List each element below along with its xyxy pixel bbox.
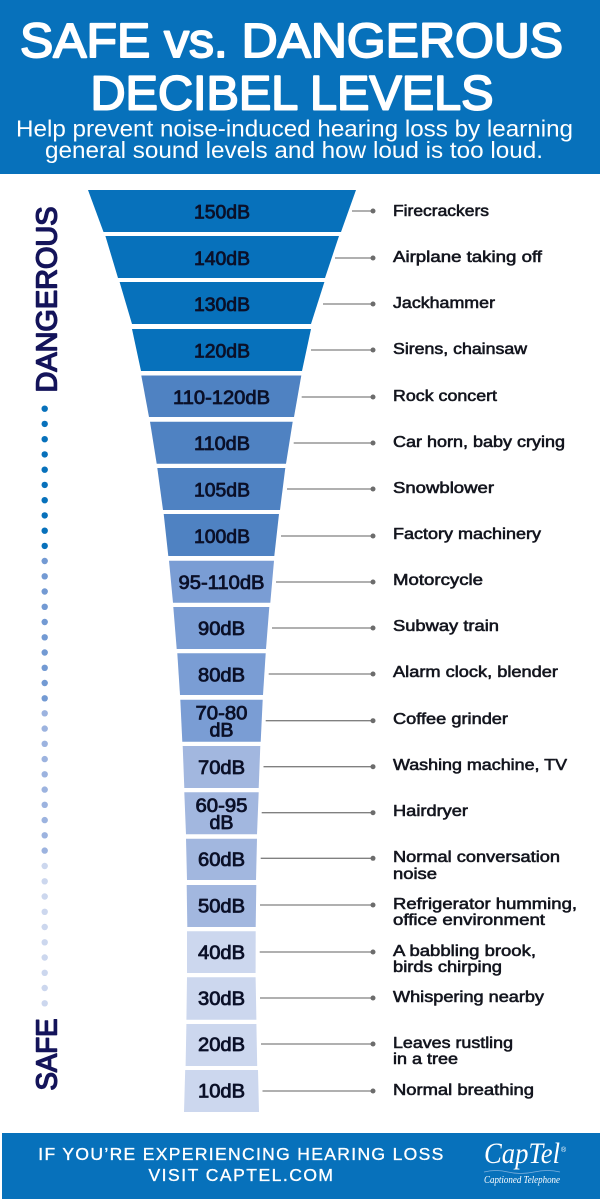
row: 100dB: 100dB xyxy=(194,527,250,548)
row: 150dB xyxy=(88,190,489,232)
row: 105dB: 105dB xyxy=(194,480,250,502)
row: 50dB: office environment xyxy=(393,912,546,929)
row: 40dB: A babbling brook, xyxy=(393,943,536,960)
funnel chart xyxy=(88,190,577,1112)
row: 60-95dB: dB xyxy=(210,813,234,834)
row: 110dB xyxy=(150,422,565,464)
row: 70-80dB xyxy=(180,700,509,742)
row: 120dB: Sirens, chainsaw xyxy=(393,341,527,358)
subtitle: Help prevent noise-induced hearing loss by learning xyxy=(16,116,573,142)
title: DECIBEL LEVELS xyxy=(90,66,494,120)
row: 150dB: 150dB xyxy=(194,203,250,224)
call to action: IF YOU’RE EXPERIENCING HEARING LOSS xyxy=(38,1144,443,1164)
row: 140dB: Airplane taking off xyxy=(393,249,543,266)
row: 110dB: Car horn, baby crying xyxy=(393,434,565,451)
row: 100dB: Factory machinery xyxy=(393,526,541,543)
subtitle xyxy=(16,116,573,163)
row: 50dB: 50dB xyxy=(198,896,245,918)
row: 90dB: 90dB xyxy=(198,619,245,640)
row: 40dB: birds chirping xyxy=(393,959,502,976)
logo: CapTel: ® xyxy=(561,1146,567,1154)
row: 30dB: Whispering nearby xyxy=(393,989,544,1006)
row: 120dB: 120dB xyxy=(194,342,250,362)
row: 60dB: noise xyxy=(393,866,437,883)
row: 60-95dB: 60-95 xyxy=(196,796,248,817)
row: 95-110dB: Motorcycle xyxy=(393,572,483,589)
row: 120dB xyxy=(132,329,527,371)
row: 70-80dB: 70-80 xyxy=(196,703,248,724)
row: 110-120dB: Rock concert xyxy=(393,388,498,405)
row: 60-95dB xyxy=(184,792,469,834)
scale label: safe: SAFE xyxy=(32,1018,64,1090)
subtitle: general sound levels and how loud is too loud. xyxy=(45,137,543,163)
row: 110dB: 110dB xyxy=(194,434,250,455)
row: 30dB: 30dB xyxy=(198,989,245,1010)
dotted scale xyxy=(42,406,48,1006)
row: 130dB: 130dB xyxy=(194,295,250,316)
row: 70dB: Washing machine, TV xyxy=(393,757,567,774)
row: 140dB xyxy=(105,236,543,278)
row: 130dB xyxy=(120,282,496,324)
row: 60dB: Normal conversation xyxy=(393,849,560,866)
row: 10dB: Normal breathing xyxy=(393,1082,534,1099)
row: 60dB: 60dB xyxy=(198,850,245,871)
row: 80dB: 80dB xyxy=(198,666,245,686)
footer panel xyxy=(2,1133,600,1199)
row: 20dB: in a tree xyxy=(393,1051,458,1068)
row: 70dB: 70dB xyxy=(198,758,245,779)
row: 90dB: Subway train xyxy=(393,618,499,635)
row: 70-80dB: Coffee grinder xyxy=(393,711,509,728)
title xyxy=(20,14,563,120)
row: 110-120dB xyxy=(141,376,498,417)
row: 105dB xyxy=(157,468,495,510)
row: 140dB: 140dB xyxy=(194,249,250,270)
row: 40dB xyxy=(187,931,536,976)
row: 70-80dB: dB xyxy=(210,720,234,741)
row: 100dB xyxy=(164,514,541,556)
title: SAFE vs. DANGEROUS xyxy=(20,14,563,68)
row: 20dB xyxy=(186,1024,513,1068)
call to action xyxy=(38,1144,443,1185)
row: 110-120dB: 110-120dB xyxy=(173,388,270,409)
row: 40dB: 40dB xyxy=(198,943,245,964)
row: 105dB: Snowblower xyxy=(393,480,495,497)
row: 80dB xyxy=(177,653,559,695)
row: 90dB xyxy=(173,607,499,649)
row: 10dB: 10dB xyxy=(198,1082,245,1102)
logo: CapTel: Captioned Telephone xyxy=(484,1175,560,1186)
row: 130dB: Jackhammer xyxy=(393,295,496,312)
header panel xyxy=(0,0,600,174)
row: 20dB: 20dB xyxy=(198,1035,245,1056)
row: 70dB xyxy=(183,746,567,788)
logo: CapTel: CapTel xyxy=(484,1137,560,1170)
row: 20dB: Leaves rustling xyxy=(393,1035,513,1052)
row: 50dB xyxy=(187,885,577,929)
row: 60-95dB: Hairdryer xyxy=(393,803,469,820)
row: 150dB: Firecrackers xyxy=(393,203,489,220)
call to action: VISIT CAPTEL.COM xyxy=(148,1165,333,1185)
scale label: dangerous: DANGEROUS xyxy=(32,207,64,392)
logo: CapTel xyxy=(484,1137,567,1186)
row: 30dB xyxy=(186,977,544,1020)
row: 50dB: Refrigerator humming, xyxy=(393,896,577,913)
row: 80dB: Alarm clock, blender xyxy=(393,664,559,681)
row: 95-110dB xyxy=(169,561,483,603)
row: 95-110dB: 95-110dB xyxy=(178,573,264,594)
row: 10dB xyxy=(184,1070,534,1112)
row: 60dB xyxy=(186,839,560,883)
